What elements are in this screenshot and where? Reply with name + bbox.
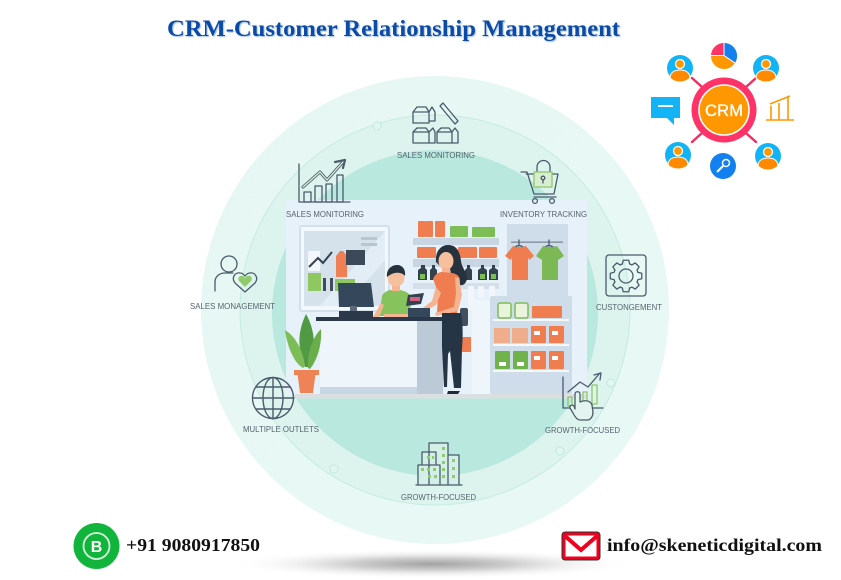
contact: email: info@skeneticdigital.com: [607, 535, 822, 555]
icon: whatsapp business: B: [91, 539, 102, 556]
icon: boxes: [413, 103, 458, 143]
feature: inventory tracking: [500, 160, 587, 219]
icon: gear: [606, 255, 646, 296]
chat bubble icon: [651, 97, 680, 125]
back shelves: [413, 221, 499, 352]
icon: person with heart: [215, 256, 257, 292]
icon: hand on chart: [563, 373, 603, 420]
icon: globe: [252, 378, 294, 419]
shopkeeper woman: [406, 245, 467, 394]
clothes rack: [505, 224, 568, 300]
search icon: [710, 153, 736, 179]
cashier man: [373, 265, 411, 318]
feature: sales management: SALES MONAGEMENT: [190, 301, 276, 311]
icon: cart with lock: [521, 160, 558, 203]
counter: [316, 317, 444, 394]
icon: CRM hub graphic: [651, 43, 794, 179]
feature: customer engagement: CUSTONGEMENT: [596, 302, 663, 312]
right shelving unit: [472, 296, 572, 394]
contact: phone: +91 9080917850: [126, 535, 260, 555]
icon: growth chart: [299, 160, 350, 202]
title: CRM-Customer Relationship Management: [167, 16, 620, 41]
feature: left sales monitoring: SALES MONITORING: [286, 209, 364, 219]
feature: top sales monitoring: SALES MONITORING: [397, 150, 475, 160]
feature: bottom growth-focused: GROWTH-FOCUSED: [401, 492, 476, 502]
icon: buildings: [416, 443, 462, 485]
feature: right growth-focused: [545, 373, 620, 435]
background circles: [201, 76, 669, 544]
person icons: [667, 55, 693, 82]
bar chart icon: [766, 96, 794, 120]
pie chart icon: [711, 43, 737, 69]
icon: whatsapp business: [74, 523, 120, 569]
feature: left sales monitoring: [286, 160, 364, 219]
feature: inventory tracking: INVENTORY TRACKING: [500, 209, 587, 219]
contact: phone: [74, 523, 260, 569]
contact: email: [562, 532, 822, 560]
feature: customer engagement: [596, 255, 663, 312]
feature: top sales monitoring: [397, 103, 475, 160]
ground shadow: [227, 549, 637, 579]
hub: [692, 78, 756, 142]
connector lines: [692, 78, 756, 142]
panel: store scene: [285, 200, 587, 398]
feature: multiple outlets: [243, 378, 319, 434]
floor: [295, 394, 587, 398]
feature: right growth-focused: GROWTH-FOCUSED: [545, 425, 620, 435]
feature: multiple outlets: MULTIPLE OUTLETS: [243, 424, 319, 434]
feature: bottom growth-focused: [401, 443, 476, 502]
monitor: [338, 283, 374, 317]
hub: CRM: [705, 102, 743, 120]
wall display board: [300, 226, 389, 311]
feature: sales management: [190, 256, 276, 311]
icon: envelope: [562, 532, 600, 560]
plant: [285, 314, 321, 393]
